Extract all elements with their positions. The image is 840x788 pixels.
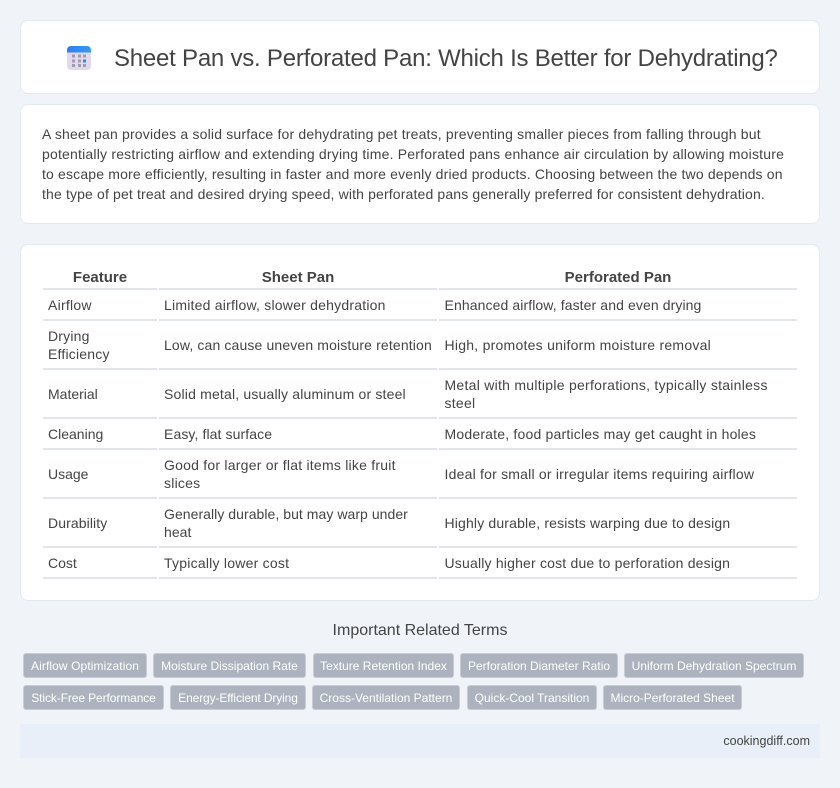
row: usage xyxy=(48,457,754,491)
row: material: Material xyxy=(48,386,98,402)
related terms tags: Moisture Dissipation Rate xyxy=(161,659,298,673)
table header: Feature xyxy=(73,269,127,286)
table header: Perforated Pan xyxy=(565,269,671,286)
panel: intro summary xyxy=(20,104,820,224)
footer bar xyxy=(20,724,820,758)
table header: Sheet Pan xyxy=(262,269,334,286)
row: drying efficiency: Drying xyxy=(48,328,90,344)
row: airflow: Airflow xyxy=(48,297,92,313)
row: cost xyxy=(48,555,730,571)
row: drying efficiency: Low, can cause uneven moisture retention xyxy=(164,337,432,353)
intro text: A sheet pan provides a solid surface for dehydrating pet treats, preventing smaller pieces from falling through but xyxy=(42,126,761,142)
row: material xyxy=(48,377,768,411)
row: drying efficiency: High, promotes uniform moisture removal xyxy=(444,337,711,353)
related terms tags xyxy=(23,653,804,710)
row: cleaning: Easy, flat surface xyxy=(164,426,272,442)
related terms tags: Micro-Perforated Sheet xyxy=(610,691,735,705)
row: material: steel xyxy=(444,395,475,411)
row: airflow xyxy=(48,297,701,313)
title: Sheet Pan vs. Perforated Pan: Which Is Better for Dehydrating? xyxy=(114,45,778,72)
row: airflow: Limited airflow, slower dehydration xyxy=(164,297,386,313)
row: usage: Good for larger or flat items like fruit xyxy=(164,457,396,473)
intro text: potentially restricting airflow and extending drying time. Perforated pans enhance air circulation by allowing moisture xyxy=(42,146,784,162)
row: durability: heat xyxy=(164,524,191,540)
title card xyxy=(20,20,820,94)
related terms tags: Airflow Optimization xyxy=(31,659,139,673)
row: durability: Durability xyxy=(48,515,107,531)
heading: related terms: Important Related Terms xyxy=(333,622,507,639)
row: cost: Typically lower cost xyxy=(164,555,289,571)
related terms tags: Uniform Dehydration Spectrum xyxy=(632,659,796,673)
related terms tags: Texture Retention Index xyxy=(320,659,447,673)
row: cleaning: Cleaning xyxy=(48,426,103,442)
intro text: to escape more efficiently, resulting in faster and more evenly dried products. Choosing between the two depends on xyxy=(42,166,783,182)
row: durability: Generally durable, but may warp under xyxy=(164,506,408,522)
row: airflow: Enhanced airflow, faster and even drying xyxy=(444,297,701,313)
row: cleaning: Moderate, food particles may get caught in holes xyxy=(444,426,756,442)
row: material: Metal with multiple perforations, typically stainless xyxy=(444,377,768,393)
related terms tags: Stick-Free Performance xyxy=(31,691,156,705)
related terms tags: Perforation Diameter Ratio xyxy=(468,659,610,673)
row: usage: Ideal for small or irregular items requiring airflow xyxy=(444,466,754,482)
intro text: the type of pet treat and desired drying speed, with perforated pans generally preferred for consistent dehydration. xyxy=(42,186,765,202)
related terms tags: Energy-Efficient Drying xyxy=(178,691,298,705)
table grid lines xyxy=(43,288,797,579)
row: drying efficiency xyxy=(48,328,711,362)
row: durability: Highly durable, resists warping due to design xyxy=(444,515,730,531)
table header xyxy=(73,269,671,286)
related terms tags: Cross-Ventilation Pattern xyxy=(320,691,452,705)
row: cost: Cost xyxy=(48,555,77,571)
row: drying efficiency: Efficiency xyxy=(48,346,110,362)
row: cleaning xyxy=(48,426,756,442)
panel: comparison table xyxy=(20,244,820,601)
row: cost: Usually higher cost due to perforation design xyxy=(444,555,730,571)
row: material: Solid metal, usually aluminum or steel xyxy=(164,386,406,402)
icon: calendar xyxy=(67,46,91,70)
row: durability xyxy=(48,506,730,540)
row: usage: Usage xyxy=(48,466,88,482)
intro text xyxy=(42,126,784,202)
related terms tags: Quick-Cool Transition xyxy=(475,691,589,705)
footer source: cookingdiff.com xyxy=(723,734,810,748)
row: usage: slices xyxy=(164,475,200,491)
